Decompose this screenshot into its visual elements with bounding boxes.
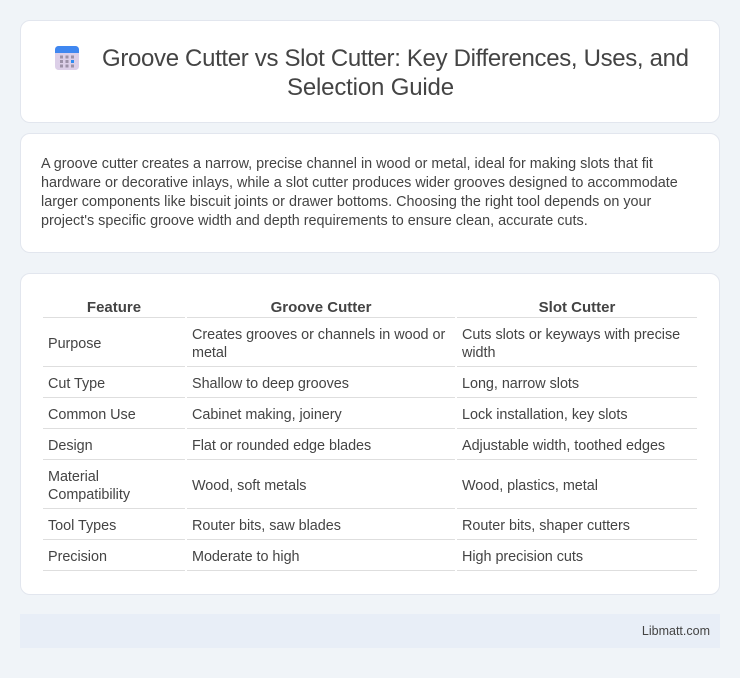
intro text: hardware or decorative inlays, while a slot cutter produces wider grooves designed to accommodate: [41, 175, 678, 191]
intro text: project's specific groove width and depth requirements to ensure clean, accurate cuts.: [41, 213, 588, 229]
row: Common Use: Common Use: [48, 407, 136, 423]
comparison table: [43, 299, 697, 571]
row: Material Compatibility: Material: [48, 469, 99, 485]
row: Tool Types: Tool Types: [48, 518, 116, 534]
table card: [20, 273, 720, 595]
row: Precision: [48, 549, 583, 565]
footer bar: [20, 614, 720, 648]
row: Purpose: metal: [192, 345, 227, 361]
intro text: A groove cutter creates a narrow, precise channel in wood or metal, ideal for making slots that fit: [41, 156, 653, 172]
row: Material Compatibility: Wood, soft metals: [192, 478, 306, 494]
row: Material Compatibility: Compatibility: [48, 487, 130, 503]
row: Tool Types: Router bits, shaper cutters: [462, 518, 630, 534]
footer text: Libmatt.com: [642, 624, 710, 638]
row: Precision: High precision cuts: [462, 549, 583, 565]
row: Tool Types: Router bits, saw blades: [192, 518, 341, 534]
row: Design: [48, 438, 665, 454]
table header: Groove Cutter: Groove Cutter: [271, 299, 371, 316]
row: Purpose: Cuts slots or keyways with precise: [462, 327, 680, 343]
title: [102, 45, 689, 101]
title: Selection Guide: [287, 74, 454, 101]
row: Material Compatibility: Wood, plastics, metal: [462, 478, 598, 494]
intro text: larger components like biscuit joints or drawer bottoms. Choosing the right tool depends on your: [41, 194, 651, 210]
row: Purpose: [48, 327, 680, 361]
table header: Slot Cutter: Slot Cutter: [539, 299, 615, 316]
row: Material Compatibility: [48, 469, 598, 503]
row: Precision: Moderate to high: [192, 549, 300, 565]
row: Purpose: Purpose: [48, 336, 101, 352]
row: Design: Flat or rounded edge blades: [192, 438, 371, 454]
row: Purpose: Creates grooves or channels in wood or: [192, 327, 445, 343]
row: Cut Type: Long, narrow slots: [462, 376, 579, 392]
row: Purpose: width: [462, 345, 495, 361]
title: Groove Cutter vs Slot Cutter: Key Differences, Uses, and: [102, 45, 689, 72]
intro card: [20, 133, 720, 253]
icon: calendar grid: [55, 46, 79, 70]
header card: [20, 20, 720, 123]
row: Common Use: Lock installation, key slots: [462, 407, 628, 423]
row: Tool Types: [48, 518, 630, 534]
row: Precision: Precision: [48, 549, 107, 565]
row: Cut Type: Shallow to deep grooves: [192, 376, 349, 392]
row: Cut Type: Cut Type: [48, 376, 105, 392]
row: Common Use: [48, 407, 628, 423]
row: Design: Adjustable width, toothed edges: [462, 438, 665, 454]
intro text: [41, 156, 678, 229]
row: Design: Design: [48, 438, 93, 454]
row: Common Use: Cabinet making, joinery: [192, 407, 342, 423]
table header: Feature: Feature: [87, 299, 141, 316]
row: Cut Type: [48, 376, 579, 392]
